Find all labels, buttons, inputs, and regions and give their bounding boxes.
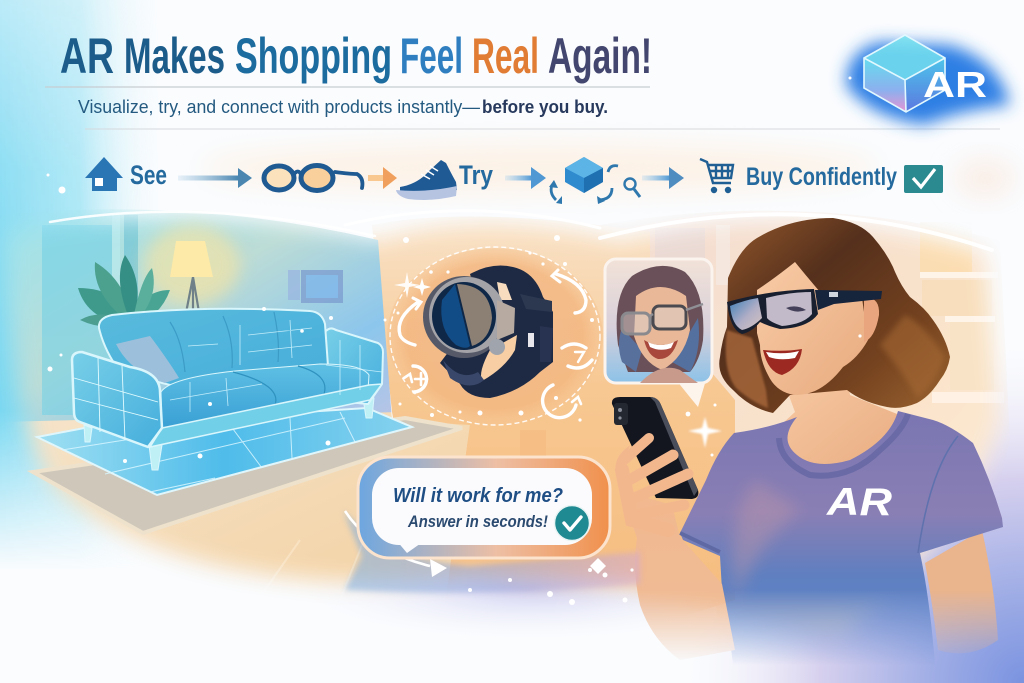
icon: teal check badge: [554, 506, 590, 540]
middle sparkles: [384, 235, 594, 422]
row sparkles: [46, 76, 852, 194]
shirt logo: AR: [826, 481, 892, 524]
AR glasses: [727, 289, 882, 334]
plant: [78, 255, 170, 327]
right arm: [925, 530, 998, 653]
arrow: cube to cart: [642, 167, 684, 189]
sofa back: [99, 309, 328, 385]
icon: shopping cart: [700, 159, 733, 192]
bubble answer text: Answer in seconds!: [407, 512, 548, 531]
sofa pillow: [116, 336, 179, 383]
arrow: glasses to shoe: [368, 167, 397, 189]
face: [757, 262, 868, 395]
step label: buy confidently: Buy Confidently: [746, 163, 897, 191]
arrow: see to glasses: [178, 168, 252, 188]
AR badge: [846, 35, 1010, 125]
arrow: try to cube: [505, 167, 546, 189]
t-shirt: [680, 411, 1003, 665]
icon: circular arrows around watch: [399, 270, 592, 418]
title: AR: [60, 28, 114, 84]
title: Shopping: [235, 28, 392, 84]
panel scene with soft edges: [0, 205, 1010, 650]
panel: middle orange product area: [372, 216, 735, 640]
title: [60, 28, 652, 84]
mouth: [763, 349, 802, 375]
speech bubble: [343, 457, 640, 593]
hand fingers: [616, 438, 688, 530]
title: Real: [472, 28, 539, 84]
selfie face: [634, 287, 690, 370]
AR badge: AR: [923, 64, 987, 105]
spark near phone: [686, 404, 722, 456]
phone: [612, 397, 698, 499]
title: Again!: [548, 28, 652, 84]
sofa seat: [161, 364, 369, 430]
rug: [33, 418, 462, 533]
selfie hair: [617, 266, 703, 372]
curtains: [42, 215, 138, 415]
title: Feel: [400, 28, 463, 84]
icon: cube with rotate and zoom: [549, 157, 640, 204]
icon: smart watch: [423, 266, 553, 398]
step label: see: See: [130, 160, 167, 190]
lower sparkles: [468, 558, 634, 605]
subtitle: Visualize, try, and connect with products instantly—: [78, 97, 480, 117]
subtitle: before you buy.: [482, 97, 608, 117]
left arm: [634, 498, 735, 658]
wall picture: [288, 270, 343, 303]
sofa right arm: [325, 328, 383, 404]
panel arcs: [50, 211, 992, 250]
neck and chest: [770, 365, 912, 480]
holographic floor: [37, 408, 412, 495]
woman: [612, 218, 1003, 665]
selfie preview card: [605, 259, 712, 407]
sofa front rail: [150, 384, 382, 447]
icon: glasses: [264, 166, 362, 190]
ear: [864, 298, 879, 342]
blue swoosh with arrow: [343, 510, 640, 593]
icon: check box: [904, 165, 943, 193]
sofa: [72, 309, 383, 470]
panel: living room with AR sofa: [0, 205, 470, 640]
lamp: [144, 225, 240, 318]
title: Makes: [124, 28, 225, 84]
product orbit ellipse: [387, 247, 603, 425]
selfie glasses: [622, 306, 686, 334]
sofa legs: [84, 398, 374, 470]
sofa left arm: [72, 352, 162, 447]
bubble question text: Will it work for me?: [393, 485, 563, 507]
icon: house: [85, 157, 123, 191]
wood floor: [15, 412, 470, 596]
room wall: [2, 210, 392, 422]
step label: try: Try: [459, 160, 493, 190]
hair back: [719, 218, 950, 413]
panel: right room shelves: [626, 211, 1008, 632]
process steps row: [85, 157, 943, 204]
room sparkles: [48, 307, 333, 463]
icon: sneaker: [396, 160, 457, 200]
